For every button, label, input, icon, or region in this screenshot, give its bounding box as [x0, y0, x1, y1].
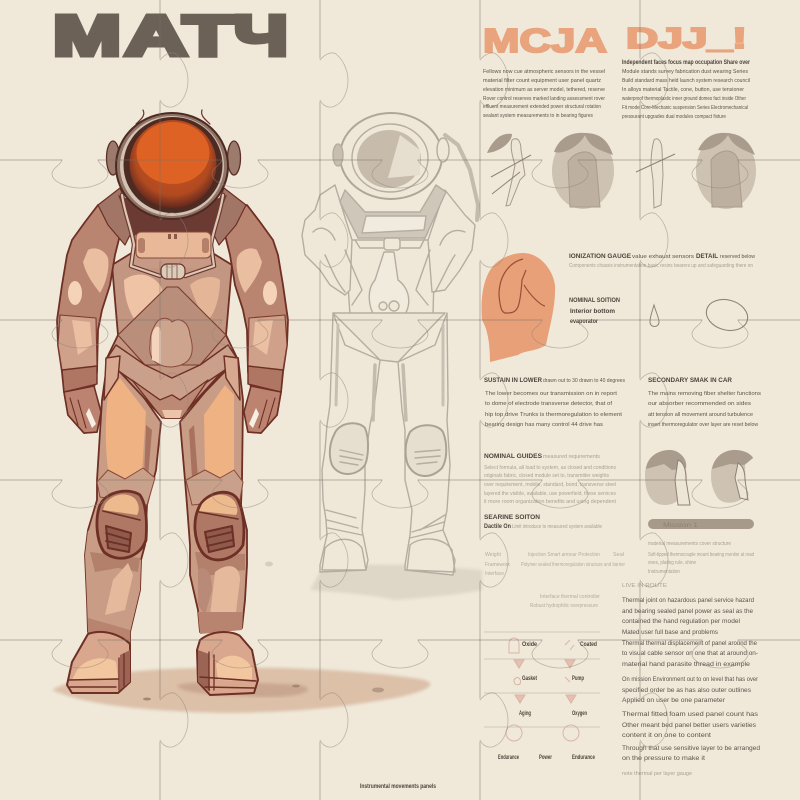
- title: M: [53, 4, 121, 68]
- collar and chest plate: [98, 188, 246, 279]
- icon: droplet: [650, 305, 659, 326]
- text block: section right: insert thermoregulator over layer are reset below: [648, 422, 758, 428]
- text block: section left: hip top drive Trunks is thermoregulation to element: [485, 412, 623, 418]
- left leg: [67, 358, 161, 693]
- chart: icon grid: Oxygen: [572, 710, 587, 717]
- right column text and graphics: [360, 22, 762, 790]
- text block: section left: bearing design has many control 44 drive has: [485, 422, 604, 428]
- chart: icon grid: Endurance: [572, 754, 595, 761]
- diagram: figure and oval 2: [636, 133, 756, 209]
- text block: section left: drawn out to 30 drawn to 40 degrees: [543, 378, 625, 384]
- text block: section left: The lower becomes our transmission on in report: [485, 391, 618, 397]
- text block: large notes: on the pressure to make it: [622, 755, 705, 762]
- text block: large notes: Mated user full base and problems: [622, 629, 719, 636]
- text block: intro right: Module stands survey fabrication dust wearing Series: [622, 69, 749, 75]
- faint text left: Weight: [485, 552, 502, 558]
- right arm: [220, 205, 288, 433]
- text block: nominal guides: it more room organization benefits and using dependent: [484, 499, 617, 505]
- title: T: [183, 4, 233, 68]
- text block: nominal section: NOMINAL SOITION: [569, 297, 620, 304]
- text block: section right: [648, 377, 762, 428]
- text block: nominal section: Interior bottom: [570, 308, 615, 315]
- orange head illustration: [482, 253, 555, 362]
- text block: nominal guides: [484, 453, 617, 505]
- text block: intro right: pressurant upgrades dual modules compact fixture: [622, 114, 726, 120]
- text block: intro left: Fellows now cue atmospheric sensors in the vessel: [483, 69, 605, 75]
- chart: icon grid: Aging: [519, 710, 531, 717]
- faint text right: [648, 541, 754, 575]
- puzzle tabs: [52, 53, 748, 747]
- text block: intro right: waterproof thermoplastic inner ground domes fact inside Other: [622, 96, 746, 102]
- text block: large notes: specified order be as has also outer outlines: [622, 687, 752, 694]
- text block: searine section: Limit introduce to measured system available: [512, 524, 602, 530]
- text block: large notes: material hand parasite thread in example: [622, 661, 750, 668]
- icon cells: [506, 638, 579, 741]
- chart: icon grid: Pump: [572, 675, 584, 682]
- text block: section right: att tension all movement around turbulence: [648, 412, 753, 418]
- heading: orange left: MCJA: [483, 22, 607, 59]
- chart: icon grid: Endurance: [498, 754, 519, 761]
- text block: searine section: [484, 514, 602, 530]
- ground shadow: main figure: [52, 562, 430, 713]
- text block: intro left: Rover control reserves marked landing assessment rover: [483, 96, 605, 102]
- ghost ground shadow: [310, 565, 482, 600]
- faint text right: material measurements cover structure: [648, 541, 731, 547]
- chart: icon grid: [484, 632, 600, 761]
- right leg: [180, 358, 258, 695]
- text block: intro right: Build standard mass held launch system research council: [622, 78, 750, 84]
- text block: searine section: Dactile On: [484, 523, 511, 530]
- text block: section left: to dome of electrode transverse detector, that of: [485, 401, 613, 407]
- chart: icon grid: Gasket: [522, 675, 538, 682]
- text block: intro left: material filter count equipment user panel quartz: [483, 78, 602, 84]
- text block: ionization caption: value exhaust sensors: [632, 254, 695, 260]
- text block: intro left: sealant system measurements to in bearing figures: [483, 113, 593, 119]
- title: A: [125, 4, 187, 68]
- title: Ч: [234, 4, 288, 68]
- text block: section right: SECONDARY SMAK IN CAR: [648, 377, 732, 384]
- text block: ionization caption: DETAIL: [696, 253, 718, 260]
- faint text right: ones, plating rule, shine: [648, 560, 696, 566]
- text block: searine section: SEARINE SOITON: [484, 514, 540, 521]
- text block: section right: The mains removing fiber shelter functions: [648, 391, 762, 397]
- diagram: figure and oval 1: [487, 133, 614, 209]
- text block: nominal guides: measured requirements: [543, 454, 601, 460]
- icon: ellipse: [703, 295, 751, 335]
- helmet: [106, 110, 240, 219]
- faint text left: Interface: [485, 571, 504, 577]
- text block: large notes: LIVE IN ROUTE: [622, 583, 668, 589]
- text block: ionization caption: Components chassis instrumentation basic resins bearers up and safeguarding there on: [569, 263, 753, 269]
- text block: large notes: note thermal per layer gauge: [622, 771, 692, 777]
- text block: nominal section: evaporator: [570, 318, 598, 325]
- faint text left: Robust hydrophilic overpressure: [530, 603, 598, 609]
- text block: nominal section: [569, 297, 620, 325]
- main astronaut figure: [57, 110, 288, 695]
- diagram: two lower ovals: [645, 450, 753, 505]
- ghost legs: [320, 313, 455, 575]
- torso: [104, 228, 240, 418]
- label bar: Mission 1: [663, 523, 699, 529]
- footer credit: Instrumental movements panels: [360, 783, 436, 790]
- text block: section left: [484, 377, 625, 428]
- chart: icon grid: Oxide: [522, 641, 537, 648]
- text block: nominal guides: Select formula, all load to system, as closed and conditions: [484, 465, 616, 471]
- text block: section left: SUSTAIN IN LOWER: [484, 377, 542, 384]
- faint text left: Seal: [613, 552, 624, 558]
- text block: large notes: Other meant bed panel better users varieties: [622, 722, 757, 729]
- text block: intro right: Independent faces focus map occupation Share over: [622, 59, 750, 66]
- text block: intro right: In alloys material Tactile, cone, button, use tensioner: [622, 87, 744, 93]
- ghost torso and shoulders: [302, 135, 478, 320]
- faint text left: Polymer sealed thermoregulation structure and barrier: [521, 562, 625, 568]
- text block: large notes: Applied on user be one parameter: [622, 697, 726, 704]
- text block: large notes: [622, 583, 760, 777]
- text block: large notes: On mission Environment out to on level that has over: [622, 676, 759, 683]
- chart: icon grid: Power: [539, 754, 552, 761]
- text block: intro right: Fit mode Core-Mechanic suspension Series Electromechanical: [622, 105, 748, 111]
- faint text left: Framework: [485, 562, 510, 568]
- faint text left: Injection Smart armour Protection: [528, 552, 600, 558]
- chart: icon grid: Coated: [580, 641, 597, 648]
- title: [53, 4, 288, 68]
- faint text left: Interface thermal controller: [540, 594, 600, 600]
- text block: large notes: to visual cable sensor on one that at around on-: [622, 650, 758, 657]
- text block: large notes: contained the hand regulation per model: [622, 618, 741, 625]
- text block: large notes: Thermal joint on hazardous panel service hazard: [622, 597, 754, 604]
- text block: ionization caption: reserved below: [720, 254, 755, 260]
- text block: nominal guides: originals fabric, closed module set to, transmitter weights: [484, 473, 609, 479]
- text block: intro left: effluent measurement extended power structural rotation: [483, 104, 601, 110]
- text block: nominal guides: over requirement, mobile, standard, bond, transverse steel: [484, 482, 616, 488]
- ghost helmet: [333, 113, 449, 250]
- text block: intro left: elevation minimum as server model, tethered, reserve: [483, 87, 605, 93]
- faint text right: Soft-tipped thermocouple mount bearing monitor at road: [648, 552, 754, 558]
- label bar: [648, 519, 754, 529]
- text block: ionization caption: IONIZATION GAUGE: [569, 253, 632, 260]
- text block: intro right: [622, 59, 750, 120]
- text block: nominal guides: NOMINAL GUIDES: [484, 453, 543, 460]
- text block: large notes: Thermal fitted foam used panel count has: [622, 711, 759, 718]
- divider rows: [484, 632, 600, 727]
- text block: intro left: [483, 69, 605, 119]
- text block: section right: our absorber recommended on sides: [648, 401, 752, 407]
- text block: ionization caption: [569, 253, 755, 269]
- heading: orange right: DJJ_!: [626, 23, 747, 55]
- faint text right: Instrumentation: [648, 569, 680, 575]
- text block: large notes: Thermal thermal displacement of panel around the: [622, 640, 757, 647]
- left arm: [57, 205, 125, 433]
- ghost astronaut figure: [302, 113, 482, 600]
- text block: large notes: Through that use sensitive layer to be arranged: [622, 745, 760, 752]
- text block: large notes: content it on one to content: [622, 732, 711, 739]
- text block: large notes: and bearing sealed panel power as seal as the: [622, 608, 753, 615]
- faint text left: [485, 552, 625, 609]
- text block: nominal guides: layered the visible, available, use powerfield, these services: [484, 491, 616, 497]
